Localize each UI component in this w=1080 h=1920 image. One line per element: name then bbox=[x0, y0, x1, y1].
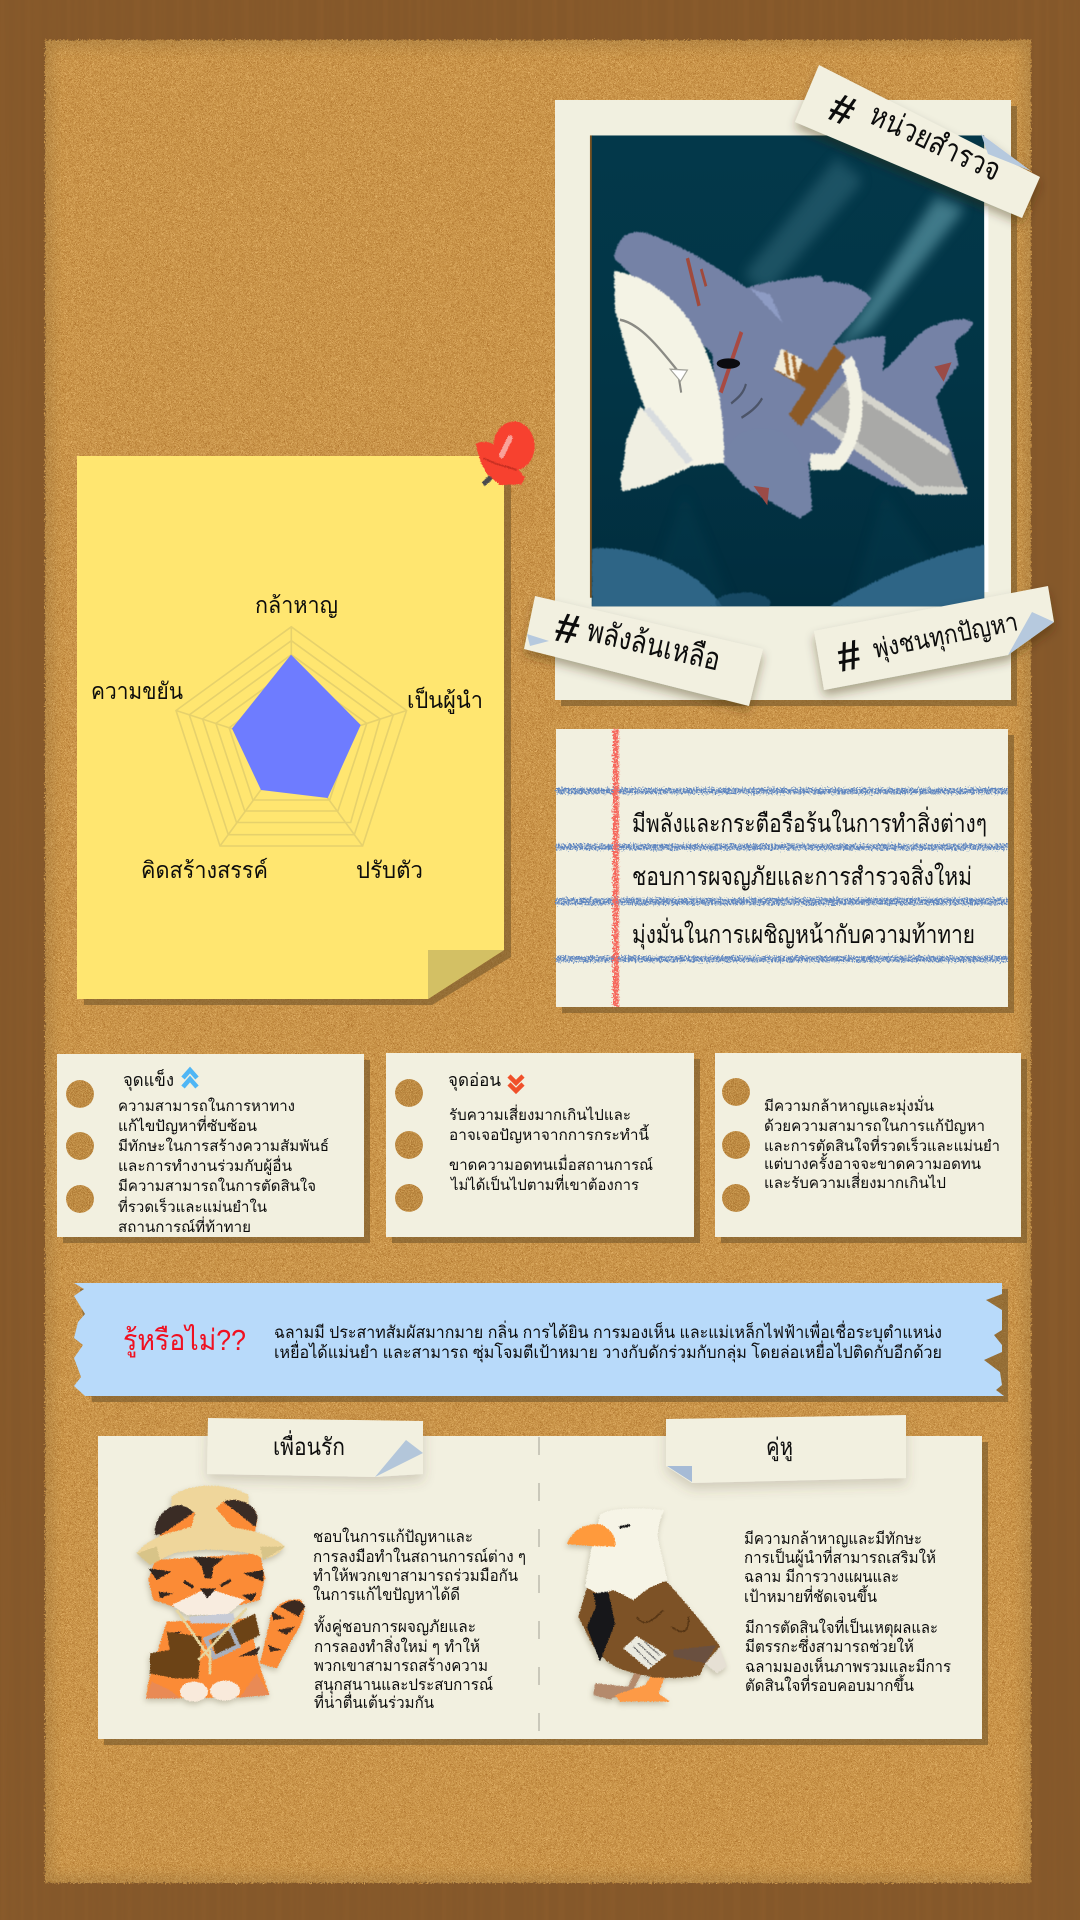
friend text: ในการแก้ไขปัญหาได้ดี bbox=[313, 1585, 460, 1604]
notebook text: มีพลังและกระตือรือร้นในการทำสิ่งต่างๆ bbox=[632, 806, 987, 838]
strengths text: มีทักษะในการสร้างความสัมพันธ์ bbox=[118, 1137, 329, 1155]
radar labels: เป็นผู้นำ bbox=[407, 685, 483, 714]
weaknesses text: รับความเสี่ยงมากเกินไปและ bbox=[449, 1104, 631, 1124]
head bbox=[148, 1553, 265, 1607]
partner text: มีความกล้าหาญและมีทักษะ bbox=[744, 1530, 922, 1548]
partner text: เป้าหมายที่ชัดเจนขึ้น bbox=[744, 1585, 877, 1606]
beak bbox=[567, 1524, 615, 1547]
partner text: ฉลามมองเห็นภาพรวมและมีการ bbox=[745, 1656, 951, 1676]
panel: yellow sticky note with radar chart bbox=[77, 422, 535, 1005]
body bbox=[578, 1581, 720, 1678]
binder holes bbox=[722, 1078, 750, 1212]
friend text: ที่น่าตื่นเต้นร่วมกัน bbox=[314, 1691, 434, 1712]
shark body bbox=[614, 232, 973, 518]
strengths text: ความสามารถในการหาทาง bbox=[118, 1097, 295, 1115]
heading: weaknesses: จุดอ่อน bbox=[448, 1070, 501, 1091]
tail bbox=[260, 1599, 304, 1668]
sword handle bbox=[778, 360, 816, 382]
friend text: ชอบในการแก้ปัญหาและ bbox=[313, 1527, 473, 1546]
muzzle bbox=[172, 1588, 245, 1615]
tag: พุ่งชนทุกปัญหา: พุ่งชนทุกปัญหา bbox=[870, 606, 1021, 665]
sword guard bbox=[795, 351, 840, 421]
radar data polygon bbox=[232, 655, 361, 798]
strengths text: แก้ไขปัญหาที่ซับซ้อน bbox=[118, 1115, 257, 1135]
radar chart bbox=[91, 592, 483, 883]
safari hat brim bbox=[137, 1527, 285, 1565]
weaknesses text: ไม่ได้เป็นไปตามที่เขาต้องการ bbox=[450, 1174, 639, 1194]
partner text: มีตรรกะซึ่งสามารถช่วยให้ bbox=[745, 1635, 914, 1656]
friend text: ทั้งคู่ชอบการผจญภัยและ bbox=[314, 1615, 476, 1637]
shark belly bbox=[614, 271, 724, 491]
strengths text: และการทำงานร่วมกับผู้อื่น bbox=[118, 1155, 292, 1175]
tag: พลังล้นเหลือ: # bbox=[551, 603, 584, 654]
panel: strengths card bbox=[57, 1054, 370, 1243]
partner text: ฉลาม มีการวางแผนและ bbox=[744, 1568, 899, 1586]
fin shade bbox=[750, 289, 783, 323]
radar labels: ความขยัน bbox=[91, 678, 183, 704]
panel: did you know tape bbox=[74, 1283, 1008, 1402]
weaknesses text: ขาดความอดทนเมื่อสถานการณ์ bbox=[449, 1154, 653, 1174]
legs and feet bbox=[593, 1672, 642, 1699]
tag: พุ่งชนทุกปัญหา bbox=[814, 586, 1054, 690]
panel: lined notebook paper bbox=[556, 729, 1014, 1013]
face stripes bbox=[148, 1557, 263, 1602]
panel: photo frame bbox=[524, 65, 1054, 706]
sword blade bbox=[812, 380, 967, 495]
summary text: มีความกล้าหาญและมุ่งมั่น bbox=[764, 1095, 934, 1116]
note corner fold bbox=[428, 950, 504, 999]
icon: double chevron down bbox=[509, 1076, 523, 1091]
friend text: สนุกสนานและประสบการณ์ bbox=[314, 1675, 493, 1695]
tab: partner bbox=[666, 1415, 906, 1483]
partner text: มีการตัดสินใจที่เป็นเหตุผลและ bbox=[745, 1616, 938, 1638]
icon: red push pin bbox=[476, 422, 535, 485]
summary text: และรับความเสี่ยงมากเกินไป bbox=[764, 1172, 946, 1192]
heading: did you know: รู้หรือไม่?? bbox=[123, 1323, 246, 1358]
radar labels: กล้าหาญ bbox=[255, 592, 338, 618]
tag: หน่วยสำรวจ: หน่วยสำรวจ bbox=[864, 97, 1007, 188]
notebook text: ชอบการผจญภัยและการสำรวจสิ่งใหม่ bbox=[632, 859, 972, 891]
body bbox=[146, 1618, 269, 1698]
strengths text bbox=[118, 1097, 329, 1236]
tag: พลังล้นเหลือ bbox=[524, 596, 763, 706]
friend text bbox=[313, 1527, 526, 1712]
friend text: การลงมือทำในสถานการณ์ต่าง ๆ bbox=[313, 1547, 526, 1566]
weaknesses text bbox=[449, 1104, 653, 1194]
blue ruled lines bbox=[556, 788, 1008, 962]
ears bbox=[155, 1505, 195, 1535]
did you know text: เหยื่อได้แม่นยำ และสามารถ ซุ่มโจมตีเป้าหมาย วางกับดักร่วมกับกลุ่ม โดยล่อเหยื่อไปติดกับอีกด้วย bbox=[274, 1340, 942, 1363]
icon: double chevron up bbox=[183, 1070, 197, 1087]
partner text: การเป็นผู้นำที่สามารถเสริมให้ bbox=[744, 1546, 936, 1568]
tab: friend bbox=[207, 1418, 423, 1477]
panel: weaknesses card bbox=[386, 1053, 700, 1243]
shark face details bbox=[620, 320, 681, 393]
bag bbox=[150, 1632, 202, 1678]
did you know text bbox=[274, 1320, 942, 1363]
strengths text: ที่รวดเร็วและแม่นยำใน bbox=[118, 1196, 267, 1216]
strengths text: สถานการณ์ที่ท้าทาย bbox=[118, 1216, 251, 1236]
tag: หน่วยสำรวจ: # bbox=[822, 83, 862, 135]
tag: หน่วยสำรวจ bbox=[795, 65, 1040, 218]
necktie bbox=[587, 1592, 615, 1662]
summary text: และการตัดสินใจที่รวดเร็วและแม่นยำ bbox=[764, 1135, 1000, 1155]
tag: พุ่งชนทุกปัญหา: # bbox=[833, 630, 865, 681]
white strap bbox=[810, 360, 856, 462]
panel: friends and partner open card bbox=[98, 1415, 988, 1745]
head feathers bbox=[585, 1508, 667, 1600]
summary text: ด้วยความสามารถในการแก้ปัญหา bbox=[764, 1117, 985, 1135]
lower fin bbox=[621, 406, 692, 490]
friend text: ทำให้พวกเขาสามารถร่วมมือกัน bbox=[313, 1566, 518, 1585]
panel: summary card bbox=[715, 1053, 1027, 1243]
notebook text: มุ่งมั่นในการเผชิญหน้ากับความท้าทาย bbox=[632, 917, 975, 950]
summary text bbox=[764, 1095, 1000, 1192]
tag: พลังล้นเหลือ: พลังล้นเหลือ bbox=[583, 613, 724, 677]
illustration: shark with sword under water bbox=[590, 135, 988, 614]
radar labels: คิดสร้างสรรค์ bbox=[141, 857, 268, 883]
binder holes bbox=[395, 1079, 423, 1212]
red margin line bbox=[613, 729, 619, 1007]
tab: partner: คู่หู bbox=[766, 1434, 793, 1462]
illustration: eagle with tie bbox=[567, 1508, 727, 1702]
radar labels: ปรับตัว bbox=[356, 857, 423, 883]
safari hat crown bbox=[170, 1486, 250, 1530]
radar labels bbox=[91, 592, 483, 883]
heading: strengths: จุดแข็ง bbox=[123, 1068, 174, 1091]
partner text bbox=[744, 1530, 951, 1695]
summary text: แต่บางครั้งอาจจะขาดความอดทน bbox=[764, 1153, 981, 1173]
weaknesses text: อาจเจอปัญหาจากการกระทำนี้ bbox=[449, 1124, 649, 1144]
notebook text bbox=[632, 806, 987, 950]
partner text: ตัดสินใจที่รอบคอบมากขึ้น bbox=[745, 1674, 914, 1695]
illustration: tiger explorer bbox=[137, 1486, 305, 1702]
tab: friend: เพื่อนรัก bbox=[273, 1430, 345, 1461]
tail bbox=[705, 1648, 727, 1673]
did you know text: ฉลามมี ประสาทสัมผัสมากมาย กลิ่น การได้ยิน การมองเห็น และแม่เหล็กไฟฟ้าเพื่อเชื่อระบุตำแหน่ง bbox=[274, 1320, 942, 1343]
friend text: พวกเขาสามารถสร้างความ bbox=[314, 1657, 488, 1675]
side fin bbox=[724, 428, 812, 518]
belt and buckle bbox=[210, 1613, 260, 1657]
friend text: การลองทำสิ่งใหม่ ๆ ทำให้ bbox=[314, 1635, 480, 1656]
strengths text: มีความสามารถในการตัดสินใจ bbox=[118, 1177, 316, 1195]
paper note bbox=[623, 1636, 667, 1669]
rope bbox=[177, 1608, 247, 1674]
binder holes bbox=[66, 1080, 94, 1213]
